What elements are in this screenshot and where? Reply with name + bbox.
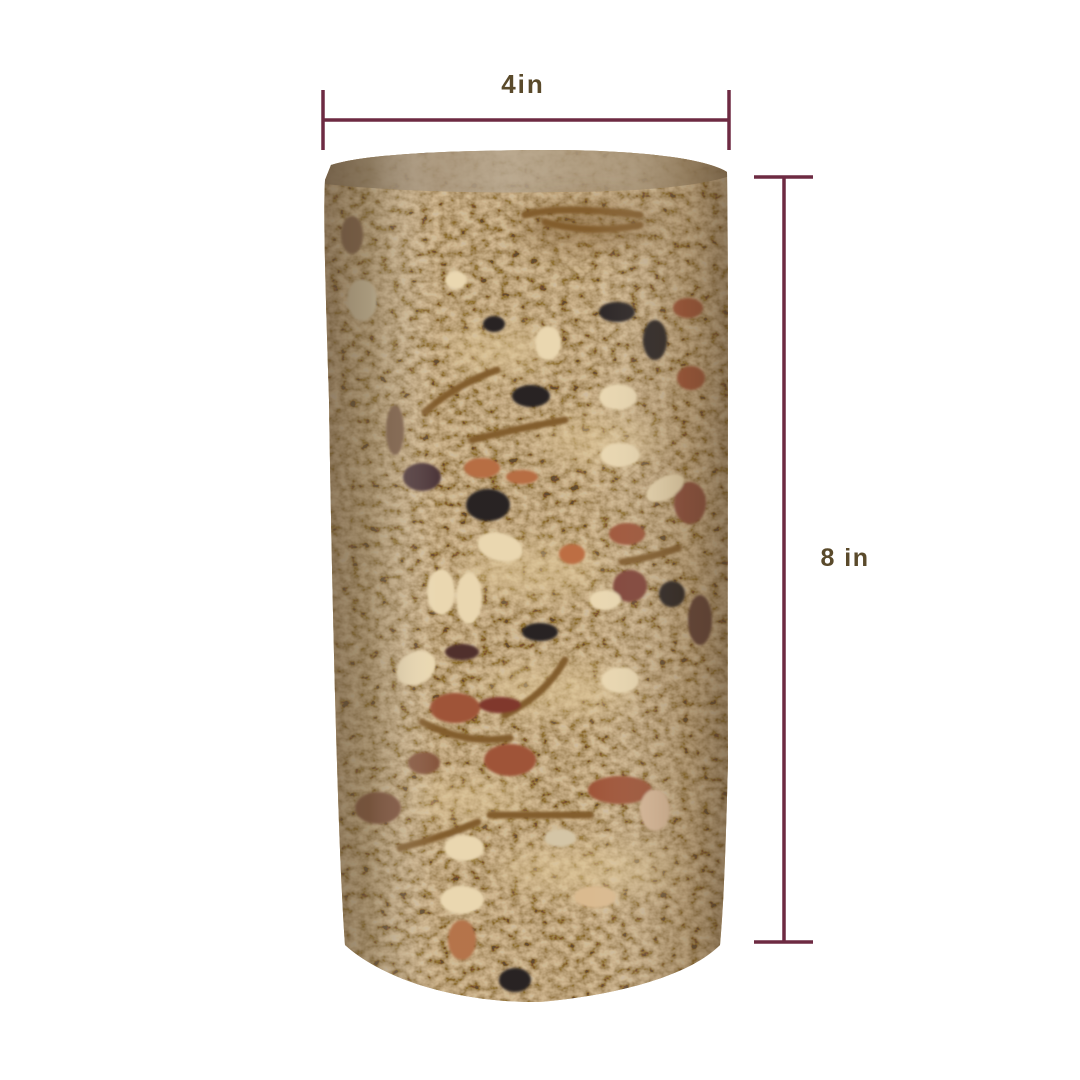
- height label: 8 in: [820, 544, 870, 572]
- height dimension line: [754, 177, 813, 942]
- sealed top of cylinder: [325, 150, 730, 193]
- photo: seed cylinder: [320, 145, 735, 1010]
- width label: 4in: [501, 69, 545, 99]
- width dimension line: [323, 90, 729, 150]
